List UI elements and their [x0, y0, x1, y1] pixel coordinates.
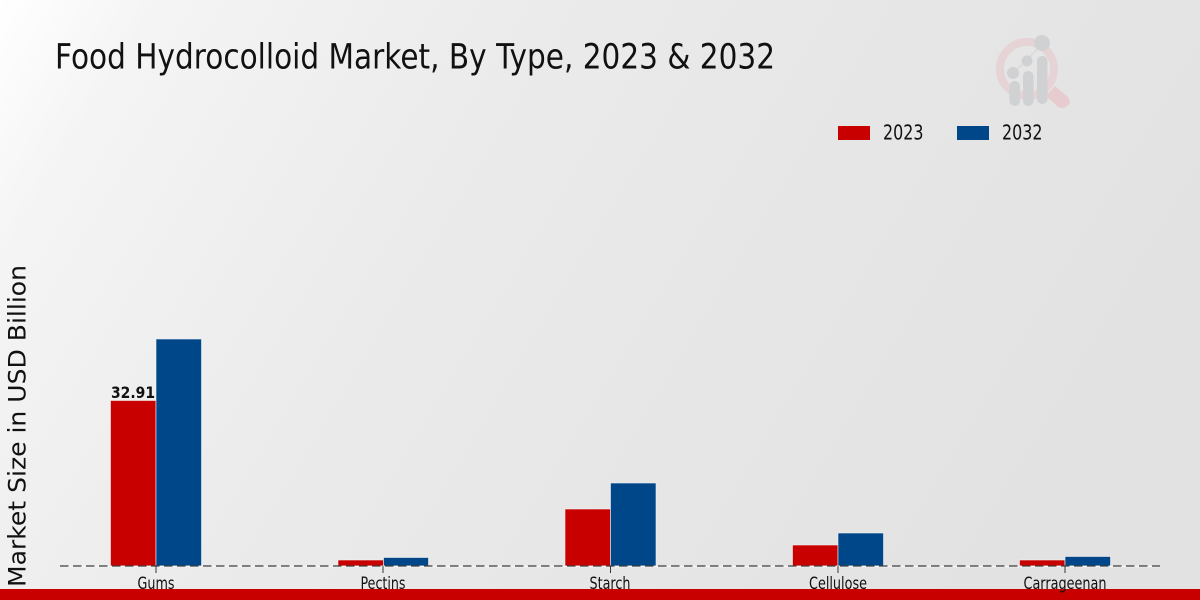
bar chart [60, 339, 1160, 573]
legend item: 2032 [957, 120, 1042, 144]
category labels: Carrageenan [1024, 574, 1106, 594]
data label: 32.91: 32.91 [111, 383, 155, 402]
icon: magnifier logo watermark [1000, 35, 1070, 108]
bars: Starch [565, 483, 656, 566]
category labels: Cellulose [809, 574, 867, 594]
baseline [60, 566, 1160, 568]
bars: Cellulose [792, 533, 884, 566]
category labels: Starch [590, 574, 630, 594]
category labels: Pectins [360, 574, 406, 594]
footer bar [0, 589, 1200, 600]
title: Food Hydrocolloid Market, By Type, 2023 & 2032 [55, 38, 775, 78]
legend item: 2032: 2032 [1002, 120, 1042, 144]
legend item: 2023 [838, 120, 924, 144]
y-axis label: Market Size in USD Billion [2, 265, 32, 587]
legend [838, 120, 1042, 144]
category labels [138, 574, 1106, 594]
bars: Carrageenan [1020, 556, 1110, 566]
category labels: Gums [138, 574, 175, 594]
legend item: 2023: 2023 [883, 120, 924, 144]
bars: Gums [110, 339, 202, 566]
bars: Pectins [338, 558, 428, 566]
